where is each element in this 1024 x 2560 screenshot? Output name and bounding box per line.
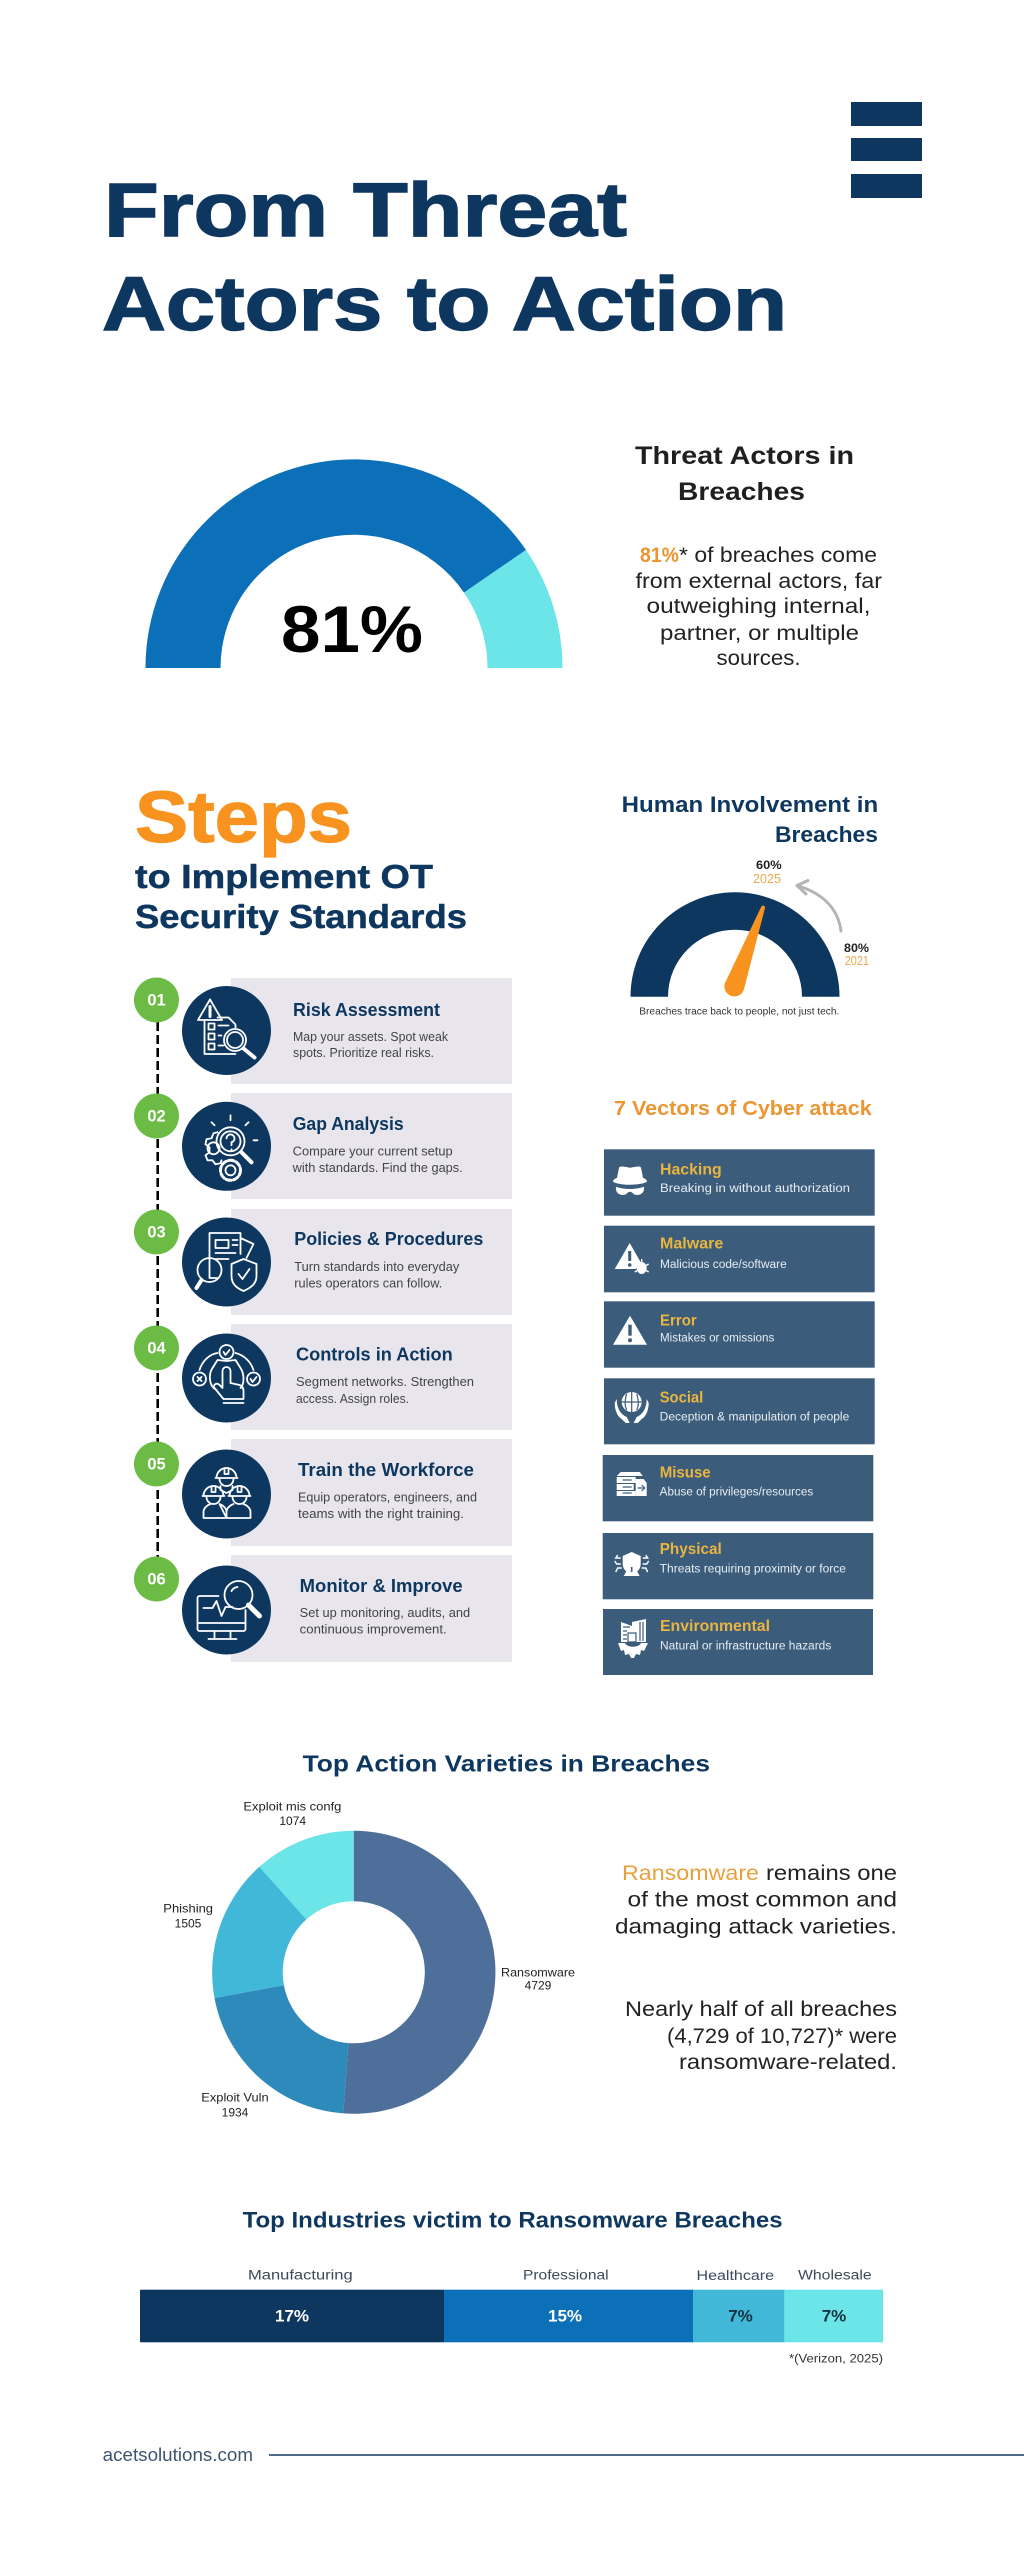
needle (724, 906, 765, 996)
chart: industries stacked bar (140, 2267, 883, 2342)
chart: action varieties donut (163, 1800, 575, 2119)
title: From Threat (104, 168, 627, 253)
panel: misuse: Misuse (660, 1464, 711, 1481)
chart: industries stacked bar: Wholesale (798, 2267, 872, 2282)
panel: step 6 monitor and improve: 06 (147, 1571, 166, 1589)
panel: step 4 controls in action: 04 (147, 1340, 166, 1358)
panel: step 2 gap analysis: Gap Analysis (293, 1114, 404, 1134)
panel: step 5 train the workforce: 05 (147, 1456, 166, 1474)
text block: ransomware commentary: damaging attack varieties. (615, 1915, 897, 1938)
panel: step 1 risk assessment: 01 (147, 992, 166, 1010)
heading: threat actors: Threat Actors in (635, 442, 854, 470)
icon: gap analysis (206, 1115, 258, 1180)
panel: step 3 policies and procedures (134, 1209, 512, 1315)
chart: action varieties donut: Phishing (163, 1902, 213, 1916)
panel: step 3 policies and procedures: Turn standards into everyday (294, 1260, 460, 1274)
icon: hacker (613, 1167, 647, 1195)
heading: steps (135, 778, 467, 935)
panel: step 5 train the workforce: Equip operators, engineers, and (298, 1491, 477, 1505)
text block: threat actors description: * of breaches come (679, 544, 877, 567)
chart: industries stacked bar: Healthcare (696, 2268, 774, 2283)
panel: malware (604, 1226, 875, 1292)
heading: 7 vectors: 7 Vectors of Cyber attack (614, 1098, 873, 1120)
title (102, 168, 787, 347)
panel: step 2 gap analysis: Compare your current setup (293, 1145, 453, 1159)
panel: physical (603, 1533, 873, 1599)
panel: step 6 monitor and improve: Set up monitoring, audits, and (300, 1606, 470, 1620)
panel: step 2 gap analysis: 02 (147, 1108, 166, 1126)
icon: building on gear (618, 1619, 648, 1658)
chart: action varieties donut: Exploit Vuln (201, 2091, 269, 2105)
panel: misuse: Abuse of privileges/resources (660, 1487, 814, 1499)
chart: industries stacked bar: 7% (728, 2307, 753, 2326)
panel: step 5 train the workforce: teams with the right training. (298, 1507, 464, 1521)
arrow: 2021 to 2025 (797, 880, 841, 931)
chart: action varieties donut: 1505 (175, 1917, 202, 1931)
heading: human involvement: Breaches (775, 822, 878, 847)
panel: step 6 monitor and improve: continuous improvement. (300, 1623, 447, 1637)
chart: human involvement gauge: 2021 (845, 953, 869, 968)
chart: 81% external actors gauge (145, 459, 563, 668)
panel: error (604, 1301, 875, 1368)
panel: step 3 policies and procedures: 03 (147, 1224, 166, 1242)
text block: ransomware commentary: (4,729 of 10,727)* were (667, 2025, 897, 2048)
panel: step 2 gap analysis (134, 1093, 512, 1199)
text block: ransomware commentary: of the most common and (628, 1889, 897, 1912)
panel: step 1 risk assessment (134, 978, 512, 1084)
panel: step 3 policies and procedures: rules operators can follow. (294, 1277, 442, 1291)
panel: step 4 controls in action: Segment networks. Strengthen (296, 1375, 474, 1389)
chart: 81% external actors gauge: 81% (281, 592, 423, 666)
panel: step 3 policies and procedures: Policies & Procedures (294, 1229, 483, 1249)
panel: physical: Physical (660, 1541, 722, 1558)
chart: action varieties donut: Ransomware (501, 1966, 575, 1980)
panel: social: Social (660, 1389, 703, 1406)
icon: controls (193, 1345, 260, 1403)
icon: menu bars (851, 102, 922, 198)
icon: shield with warning (615, 1552, 649, 1576)
icon: risk assessment (198, 1000, 254, 1058)
panel: threat actors text (635, 442, 882, 670)
chart: action varieties donut: 1074 (279, 1814, 306, 1828)
panel: error: Mistakes or omissions (660, 1332, 775, 1344)
text block: ransomware commentary: Ransomware (622, 1862, 759, 1885)
text block: threat actors description: outweighing internal, (646, 595, 870, 618)
heading: human involvement (622, 792, 878, 847)
text block: ransomware commentary: ransomware-related. (679, 2051, 897, 2074)
timeline: dashed connector (156, 1022, 159, 1560)
panel: step 1 risk assessment: Risk Assessment (293, 1000, 440, 1020)
panel: step 4 controls in action: access. Assign roles. (296, 1392, 409, 1406)
panel: social: Deception & manipulation of people (660, 1412, 849, 1424)
panel: step 1 risk assessment: spots. Prioritize real risks. (293, 1046, 434, 1060)
chart: human involvement gauge: 60% (756, 858, 782, 872)
panel: step 5 train the workforce: Train the Workforce (298, 1460, 474, 1480)
chart: industries stacked bar: Professional (523, 2267, 609, 2282)
icon: warning triangle (613, 1316, 647, 1345)
icon: workers (202, 1468, 250, 1518)
chart: industries stacked bar: Manufacturing (248, 2267, 353, 2282)
text block: threat actors description: 81% (640, 544, 679, 567)
title: Actors to Action (102, 262, 787, 347)
panel: malware: Malicious code/software (660, 1259, 787, 1271)
panel: misuse (603, 1455, 873, 1521)
panel: step 4 controls in action: Controls in Action (296, 1345, 453, 1365)
text block: threat actors description: sources. (716, 647, 800, 670)
chart: human involvement gauge (630, 858, 869, 1018)
chart: action varieties donut: 4729 (525, 1978, 552, 1992)
heading: threat actors: Breaches (678, 478, 805, 506)
panel: social (604, 1378, 875, 1444)
panel: malware: Malware (660, 1236, 724, 1253)
text block: ransomware commentary: remains one (766, 1862, 897, 1885)
text block: ransomware commentary: Nearly half of all breaches (625, 1998, 897, 2021)
chart: human involvement gauge: 2025 (753, 871, 781, 886)
footer: acetsolutions.com (103, 2445, 253, 2465)
text block: threat actors description (636, 544, 882, 670)
chart: action varieties donut: 1934 (222, 2105, 249, 2119)
panel: step 4 controls in action (134, 1324, 512, 1430)
heading: human involvement: Human Involvement in (622, 792, 878, 817)
heading: top industries: Top Industries victim to Ransomware Breaches (243, 2207, 783, 2232)
heading: steps: Steps (135, 778, 352, 858)
panel: environmental: Environmental (660, 1618, 770, 1635)
panel: hacking (604, 1149, 875, 1216)
panel: step 6 monitor and improve (134, 1555, 512, 1662)
text block: ransomware commentary (615, 1862, 897, 2074)
heading: top action varieties: Top Action Varieties in Breaches (303, 1751, 710, 1777)
heading: threat actors (635, 442, 854, 506)
chart: industries stacked bar: 17% (275, 2307, 309, 2326)
panel: step 6 monitor and improve: Monitor & Improve (300, 1576, 463, 1596)
icon: monitoring (198, 1581, 260, 1639)
source note: *(Verizon, 2025) (789, 2354, 883, 2366)
text block: threat actors description: partner, or multiple (660, 622, 859, 645)
chart: human involvement gauge: 80% (844, 941, 869, 955)
icon: warning with bug (615, 1243, 649, 1274)
chart: human involvement gauge: Breaches trace back to people, not just tech. (639, 1007, 839, 1018)
panel: step 1 risk assessment: Map your assets. Spot weak (293, 1030, 449, 1044)
heading: steps: to Implement OT (135, 858, 433, 895)
icon: policies (196, 1233, 256, 1291)
panel: physical: Threats requiring proximity or force (660, 1564, 846, 1576)
chart: industries stacked bar: 7% (822, 2307, 846, 2326)
panel: step 2 gap analysis: with standards. Find the gaps. (292, 1161, 463, 1175)
panel: environmental (603, 1609, 873, 1675)
panel: hacking: Breaking in without authorization (660, 1183, 850, 1195)
chart: industries stacked bar: 15% (548, 2307, 582, 2326)
panel: hacking: Hacking (660, 1161, 722, 1178)
heading: steps: Security Standards (135, 898, 467, 935)
panel: step 5 train the workforce (134, 1439, 512, 1546)
panel: error: Error (660, 1312, 697, 1329)
text block: threat actors description: from external actors, far (636, 570, 882, 593)
panel: environmental: Natural or infrastructure hazards (660, 1640, 832, 1652)
chart: action varieties donut: Exploit mis confg (243, 1800, 341, 1814)
icon: hands and globe (615, 1392, 649, 1423)
icon: server and file (617, 1472, 647, 1496)
